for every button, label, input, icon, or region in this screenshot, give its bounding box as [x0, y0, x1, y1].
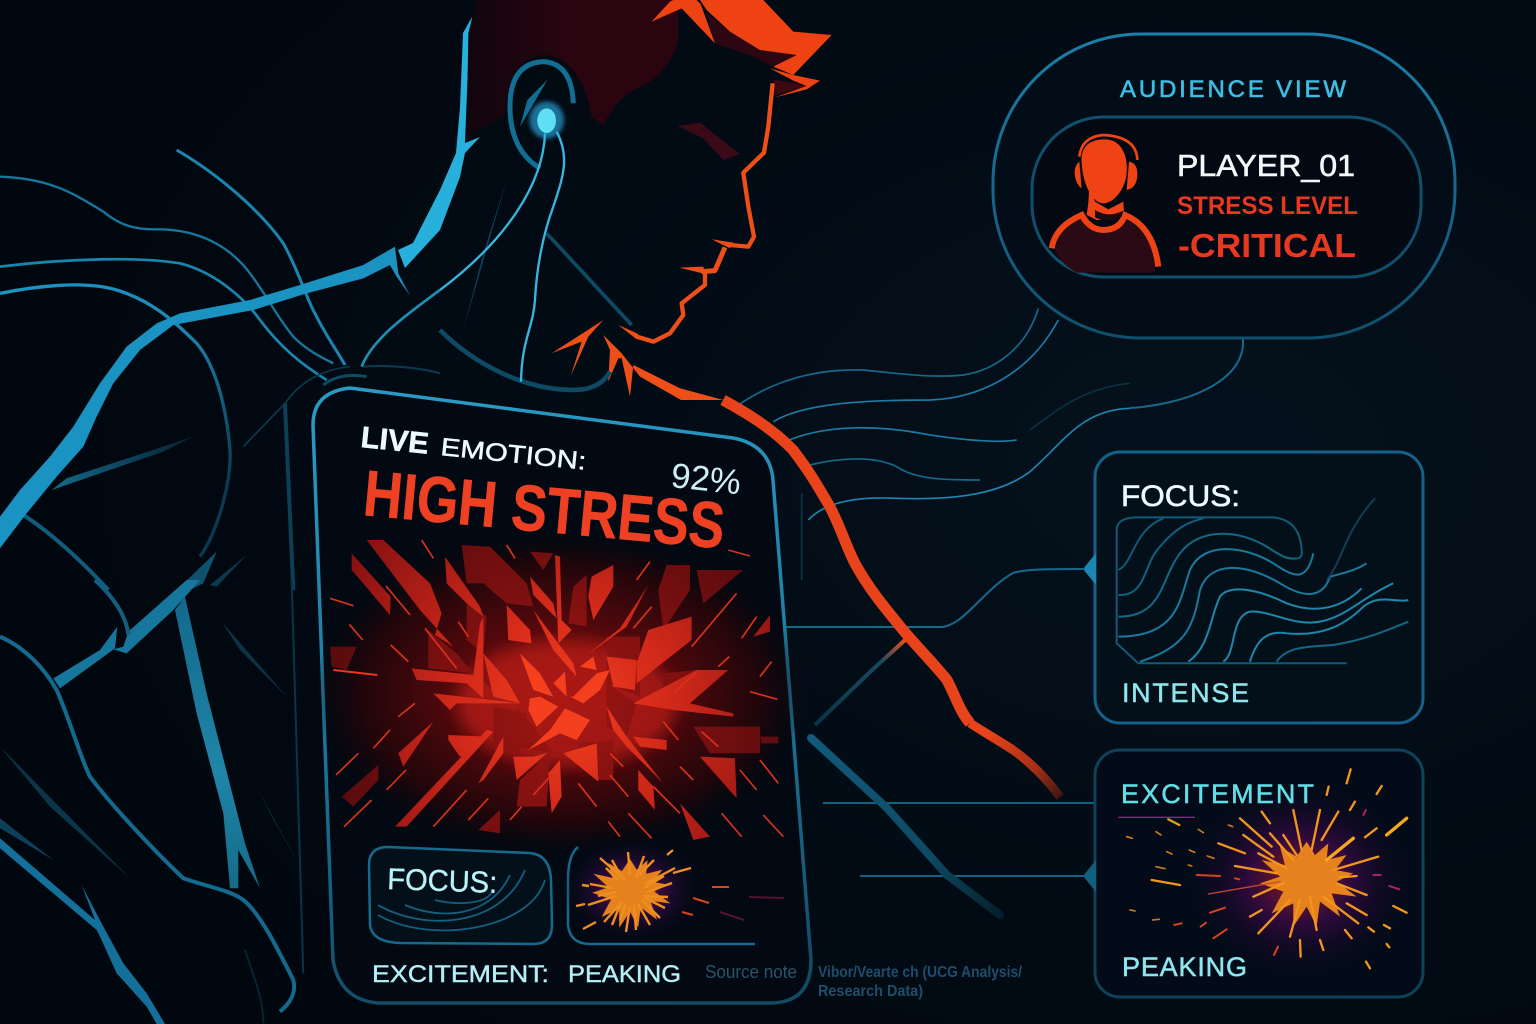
figure: head with hair, ear and earphone	[440, 0, 832, 400]
face profile line	[637, 83, 773, 342]
panel: live emotion	[313, 388, 811, 1003]
hair highlights	[652, 0, 832, 97]
player name: PLAYER_01	[1177, 148, 1355, 183]
neck line	[398, 17, 480, 268]
value: 92 percent: 92%	[669, 456, 743, 502]
figure: left arm and shoulder outline	[0, 17, 480, 1024]
chart: orange spark burst	[1118, 769, 1413, 977]
source note: Research Data)	[818, 983, 923, 1000]
panel: excitement peaking	[1083, 750, 1423, 997]
shoulder and upper-arm lines	[0, 150, 440, 590]
main shoulder band	[0, 247, 410, 548]
neck shadow lines	[440, 233, 632, 390]
ear	[510, 62, 573, 168]
orange shoulder and arm line	[723, 400, 1060, 797]
heading: excitement: EXCITEMENT	[1121, 779, 1314, 809]
panel frame	[313, 388, 811, 1003]
player card	[1032, 117, 1421, 277]
heading: focus: FOCUS:	[1121, 480, 1240, 513]
earphone bud	[529, 101, 564, 139]
chart: flowing contour lines	[1117, 498, 1408, 663]
lower arm outline	[0, 580, 303, 1024]
heading: live emotion	[359, 421, 587, 476]
text: excitement peaking: PEAKING	[568, 961, 681, 988]
source note: Source note	[705, 962, 797, 982]
right arm teal stroke	[811, 738, 1000, 915]
label: intense: INTENSE	[1122, 678, 1249, 708]
source note: Vibor/Vearte ch (UCG Analysis/	[818, 964, 1022, 981]
sub-panel: focus: FOCUS:	[387, 863, 498, 900]
sub-panel: excitement spark	[562, 838, 784, 944]
heading: audience view: AUDIENCE VIEW	[1120, 76, 1346, 103]
label: peaking: PEAKING	[1122, 952, 1247, 982]
heading: high stress: HIGH STRESS	[361, 456, 728, 562]
panel: focus intense	[1083, 452, 1423, 723]
heading: live emotion: LIVE	[359, 421, 430, 461]
stress level label: STRESS LEVEL	[1177, 192, 1358, 220]
icon: player with headset	[1052, 135, 1158, 273]
connector lines to the audience and metric panels	[738, 280, 1243, 876]
sub-panel: focus	[369, 847, 552, 944]
hair shadow	[467, 0, 678, 137]
connector node	[1083, 860, 1096, 892]
source note	[705, 962, 1022, 1000]
panel: audience view	[993, 34, 1455, 338]
text: excitement peaking	[372, 961, 681, 988]
collar marks	[552, 320, 603, 376]
chart: shattered red stress burst	[313, 533, 807, 853]
critical status: -CRITICAL	[1178, 227, 1356, 264]
earphone wires	[440, 132, 564, 382]
heading: live emotion: EMOTION:	[439, 433, 587, 476]
text: excitement peaking: EXCITEMENT:	[372, 961, 549, 988]
connector node	[1083, 553, 1096, 585]
eyebrow	[677, 123, 740, 160]
arm branch	[815, 640, 905, 725]
